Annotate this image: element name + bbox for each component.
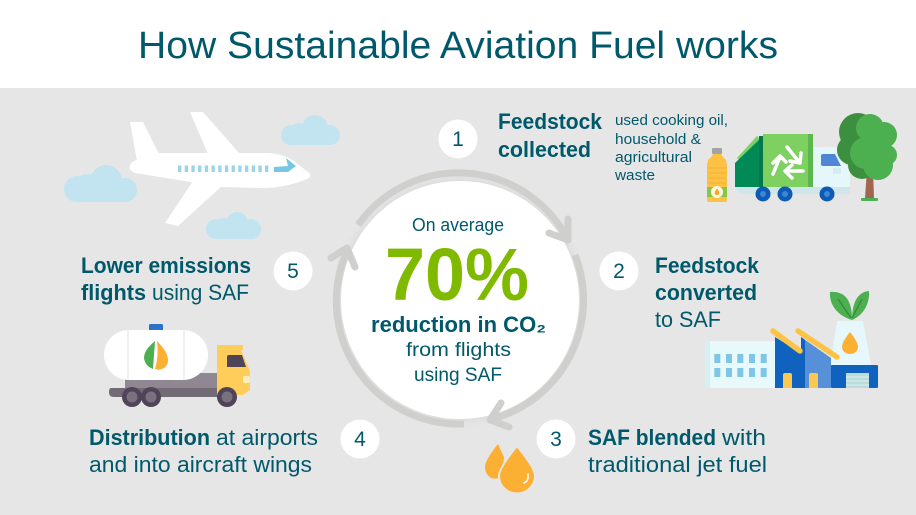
icon: airplane [130,112,310,226]
number badge 3: 3 [550,428,562,451]
text: SAF blended with traditional jet fuel: SAF blended [588,425,716,450]
text: lower emissions flights using SAF: using SAF [152,280,249,305]
icon: recycling truck [735,134,850,202]
title: How Sustainable Aviation Fuel works [138,25,778,67]
heading: feedstock converted to SAF: Feedstock [655,253,760,278]
text: distribution at airports and into aircraft wings: Distribution [89,425,210,450]
step 4: distribution [89,324,380,477]
text: feedstock types: used cooking oil, [615,113,728,129]
illustration: airplane and clouds [64,112,340,239]
cycle arrow: step 1 to 2 [358,173,568,240]
text: lower emissions flights using SAF: Lower emissions [81,253,251,278]
heading: feedstock converted to SAF: to SAF [655,307,721,332]
heading: feedstock collected: Feedstock [498,109,603,134]
central circle [331,173,584,427]
icon: SAF factory [705,291,878,388]
number badge 4: 4 [354,428,366,451]
text: lower emissions flights using SAF [81,253,251,305]
number badge 2: 2 [613,260,625,283]
icon: cloud left [64,165,137,202]
step 1: feedstock collected [438,109,897,202]
number badge 5 [274,252,312,290]
cycle arrow: step 4 to 5 [331,248,464,424]
heading: feedstock collected: collected [498,137,591,162]
text: lower emissions flights using SAF: flights [81,280,146,305]
step 3: SAF blended [485,420,767,494]
icon: cloud bottom [206,212,261,239]
text: distribution at airports and into aircraft wings: and into aircraft wings [89,452,312,477]
heading: feedstock collected [498,109,603,162]
text: feedstock types: waste [614,168,655,184]
text: using SAF: using SAF [414,364,502,386]
cycle arrow: step 2 to 3 [490,255,584,427]
text: feedstock types: agricultural [615,150,692,166]
text: distribution at airports and into aircraft wings: at airports [216,425,318,450]
heading: feedstock converted to SAF: converted [655,280,757,305]
text: on average: On average [412,215,504,235]
number badge 2 [600,252,638,290]
number badge 4 [340,420,380,458]
number badge 5: 5 [287,260,299,283]
number badge 1: 1 [452,128,464,151]
text: reduction in CO2: reduction in CO₂ [371,312,546,337]
text: SAF blended with traditional jet fuel: traditional jet fuel [588,452,767,477]
step 2: feedstock converted [600,252,878,388]
icon: fuel drops [485,444,535,494]
text: SAF blended with traditional jet fuel: with [721,425,766,450]
step 5: lower emissions [81,252,312,305]
text: SAF blended with traditional jet fuel [588,425,767,477]
statistic: 70%: 70% [385,233,529,316]
text: distribution at airports and into aircraft wings [89,425,318,477]
number badge 1 [438,120,478,158]
icon: cooking oil bottle [707,148,727,202]
number badge 3 [536,420,576,458]
icon: cloud right [281,115,340,145]
text: feedstock types: household & [615,132,701,148]
icon: tree [837,113,897,201]
text: feedstock types [614,113,728,184]
text: from flights: from flights [406,339,511,361]
icon: fuel tanker truck [104,324,250,407]
heading: feedstock converted to SAF [655,253,760,332]
